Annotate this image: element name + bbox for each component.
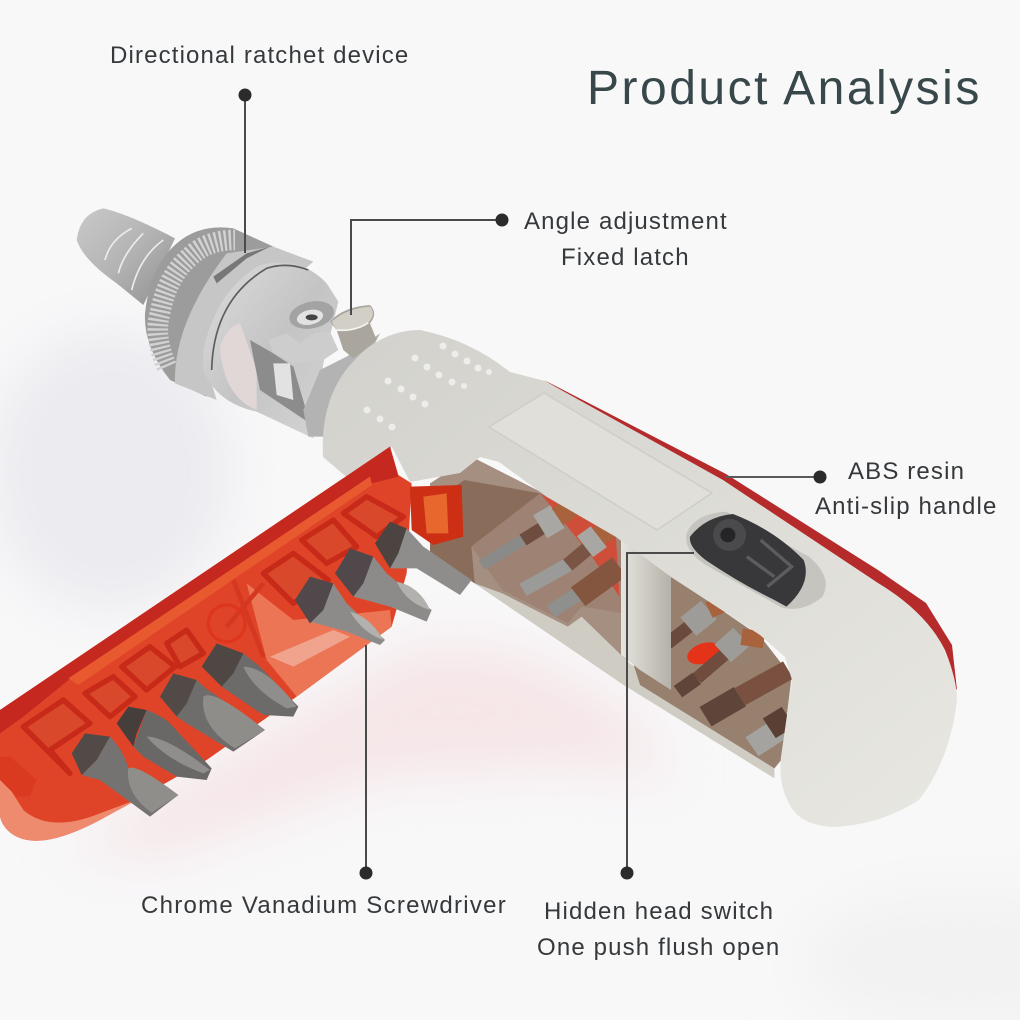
silver collar <box>175 247 313 400</box>
callout: hidden head switch: One push flush open <box>537 934 780 961</box>
red glow <box>540 493 619 597</box>
red transparent bit tray <box>0 447 472 841</box>
callout: directional ratchet device: Directional ratchet device <box>110 42 409 69</box>
tray body <box>0 447 412 841</box>
bolt <box>287 297 337 333</box>
title: Product Analysis <box>587 62 982 115</box>
collar marking <box>213 247 270 283</box>
handle label panel <box>489 393 712 530</box>
callout: angle adjustment: Fixed latch <box>561 244 690 271</box>
red back of handle <box>544 380 957 690</box>
clips <box>23 497 403 773</box>
cavity interior <box>430 457 792 778</box>
grip dots <box>364 342 492 430</box>
rib <box>227 580 263 657</box>
tray bit 3 flat <box>160 673 265 752</box>
callout: angle adjustment: Angle adjustment <box>524 208 728 235</box>
callout: chrome vanadium <box>141 645 507 919</box>
red spot <box>684 638 724 668</box>
face ring line <box>212 265 308 370</box>
hidden head switch <box>686 512 826 609</box>
tray top band <box>0 447 398 733</box>
callout: ABS resin: Anti-slip handle <box>815 493 998 520</box>
callout: ABS resin <box>725 458 998 520</box>
end plug <box>0 757 37 797</box>
left section floor <box>471 493 623 623</box>
tray bit 7 flat <box>375 522 472 595</box>
callout: hidden head switch <box>537 553 780 961</box>
tray light strip <box>68 477 372 685</box>
tray highlight <box>270 630 350 667</box>
handle pillar <box>621 540 671 690</box>
callout: angle adjustment <box>351 208 728 315</box>
tray clear patch <box>247 583 392 697</box>
neck <box>303 333 380 437</box>
latch pin <box>330 305 377 358</box>
mechanism slot <box>250 340 310 423</box>
pink panel <box>220 323 257 410</box>
front face <box>203 262 338 438</box>
knurled ring <box>145 227 273 397</box>
screwdriver illustration <box>0 208 957 841</box>
callout: hidden head switch: Hidden head switch <box>544 898 774 925</box>
handle grey body <box>323 330 957 827</box>
left section base <box>430 457 626 687</box>
hex socket shaft <box>77 208 175 305</box>
ratchet head <box>77 208 380 438</box>
left section shadow <box>430 480 540 583</box>
tray bit 6 philips <box>335 548 432 622</box>
callout: chrome vanadium: Chrome Vanadium Screwdriver <box>141 892 507 919</box>
callout: ABS resin: ABS resin <box>848 458 965 485</box>
tray bit 2 philips <box>117 707 212 780</box>
rail <box>475 583 774 778</box>
ring clip <box>208 605 245 642</box>
tray bit 5 philips <box>295 577 385 645</box>
callout: directional ratchet device <box>110 42 409 253</box>
gear <box>268 332 338 363</box>
tray bit 4 philips <box>202 643 298 717</box>
orange socket <box>410 485 463 545</box>
tray bit 1 flat <box>72 733 178 817</box>
right section <box>633 573 792 768</box>
pawl <box>273 363 293 400</box>
bits in handle <box>482 503 788 747</box>
tray lower rim <box>0 773 140 841</box>
